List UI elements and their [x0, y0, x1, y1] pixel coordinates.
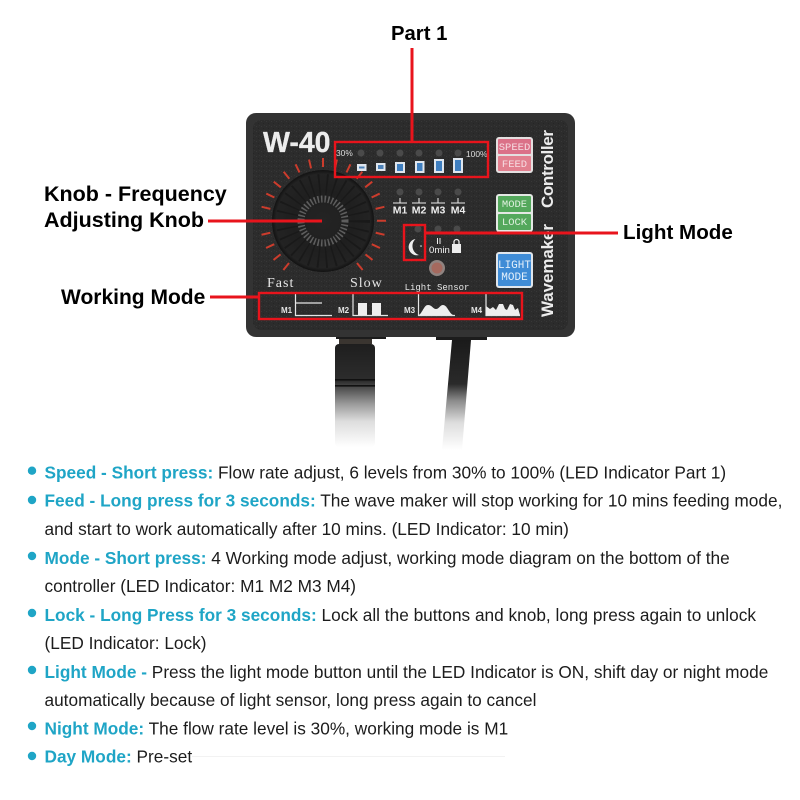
- button: speed / feed: SPEED: [499, 142, 530, 154]
- button: light mode: [496, 252, 533, 288]
- working mode diagrams: M1: [281, 306, 293, 315]
- callout: Knob - Frequency Adjusting Knob: [44, 182, 322, 232]
- working mode diagrams: M4: [471, 306, 483, 315]
- label: Slow: Slow: [350, 276, 383, 291]
- text block: Day Mode: Day Mode: Pre-set: [44, 747, 192, 767]
- light sensor: Light Sensor: [405, 283, 469, 293]
- text block: Speed: Speed - Short press: Flow rate adjust, 6 levels from 30% to 100% (LED Indicator Part 1): [44, 462, 726, 482]
- callout: Part 1: Part 1: [391, 23, 447, 45]
- callout: Knob - Frequency Adjusting Knob: Knob - Frequency: [44, 182, 227, 206]
- working mode diagrams: [281, 293, 520, 316]
- text block: Lock: Lock - Long Press for 3 seconds: Lock all the buttons and knob, long press again to unlock: [44, 605, 756, 625]
- speed LEDs: [336, 148, 488, 173]
- button: mode / lock: MODE: [502, 199, 527, 211]
- knob with red tick scale: [260, 158, 386, 272]
- connector: cable: [436, 333, 487, 450]
- text block: Lock: [28, 605, 756, 653]
- speed LEDs: 100%: [466, 149, 488, 159]
- text block: Light Mode: [28, 662, 768, 710]
- text block: Mode: [28, 548, 730, 596]
- controller body: [246, 113, 575, 337]
- text block: Feed: [28, 491, 782, 539]
- callout: Part 1: [335, 23, 488, 177]
- text block: Lock: (LED Indicator: Lock): [44, 633, 207, 653]
- text block: Mode: Mode - Short press: 4 Working mode adjust, working mode diagram on the bottom of the: [44, 548, 730, 568]
- connector: power plug: [335, 333, 386, 447]
- text block: Feed: Feed - Long press for 3 seconds: The wave maker will stop working for 10 mins feeding mode,: [44, 491, 782, 511]
- text block: Light Mode: automatically because of light sensor, long press again to cancel: [44, 690, 536, 710]
- speed LEDs: 30%: [336, 148, 353, 158]
- label: Fast: Fast: [267, 276, 294, 291]
- button: mode / lock: LOCK: [502, 217, 528, 229]
- mode LEDs M1-M4: M3: [431, 204, 445, 216]
- callout: Light Mode: [404, 221, 733, 260]
- button: speed / feed: [496, 137, 533, 173]
- text block: Light Mode: Light Mode - Press the light mode button until the LED Indicator is ON, shift day or night mode: [44, 662, 768, 682]
- mode LEDs M1-M4: M4: [451, 204, 465, 216]
- mode LEDs M1-M4: M1: [393, 204, 407, 216]
- text block: Feed: and start to work automatically after 10 mins. (LED Indicator: 10 min): [44, 519, 569, 539]
- callout: Knob - Frequency Adjusting Knob: Adjusting Knob: [44, 208, 204, 232]
- mode LEDs M1-M4: M2: [412, 204, 426, 216]
- working mode diagrams: M3: [404, 306, 416, 315]
- title: W-40: W-40: [263, 127, 331, 159]
- button: light mode: LIGHT: [498, 260, 531, 272]
- vertical label: Wavemaker Controller: Controller: [538, 130, 557, 208]
- callout: Working Mode: Working Mode: [61, 286, 205, 309]
- night mode, 10 min and lock indicators: [409, 226, 461, 256]
- vertical label: Wavemaker Controller: [538, 130, 557, 317]
- light sensor: [405, 260, 469, 293]
- text block: Mode: controller (LED Indicator: M1 M2 M3 M4): [44, 576, 356, 596]
- button: light mode: MODE: [501, 272, 528, 284]
- working mode diagrams: M2: [338, 306, 350, 315]
- vertical label: Wavemaker Controller: Wavemaker: [538, 224, 557, 317]
- mode LEDs M1-M4: [393, 188, 465, 216]
- button: speed / feed: FEED: [502, 159, 527, 171]
- callout: Light Mode: Light Mode: [623, 221, 733, 244]
- text block: Night Mode: Night Mode: The flow rate level is 30%, working mode is M1: [44, 718, 508, 738]
- button: mode / lock: [496, 194, 533, 232]
- night mode, 10 min and lock indicators: 0min: [429, 245, 450, 256]
- callout: Working Mode: [61, 286, 522, 319]
